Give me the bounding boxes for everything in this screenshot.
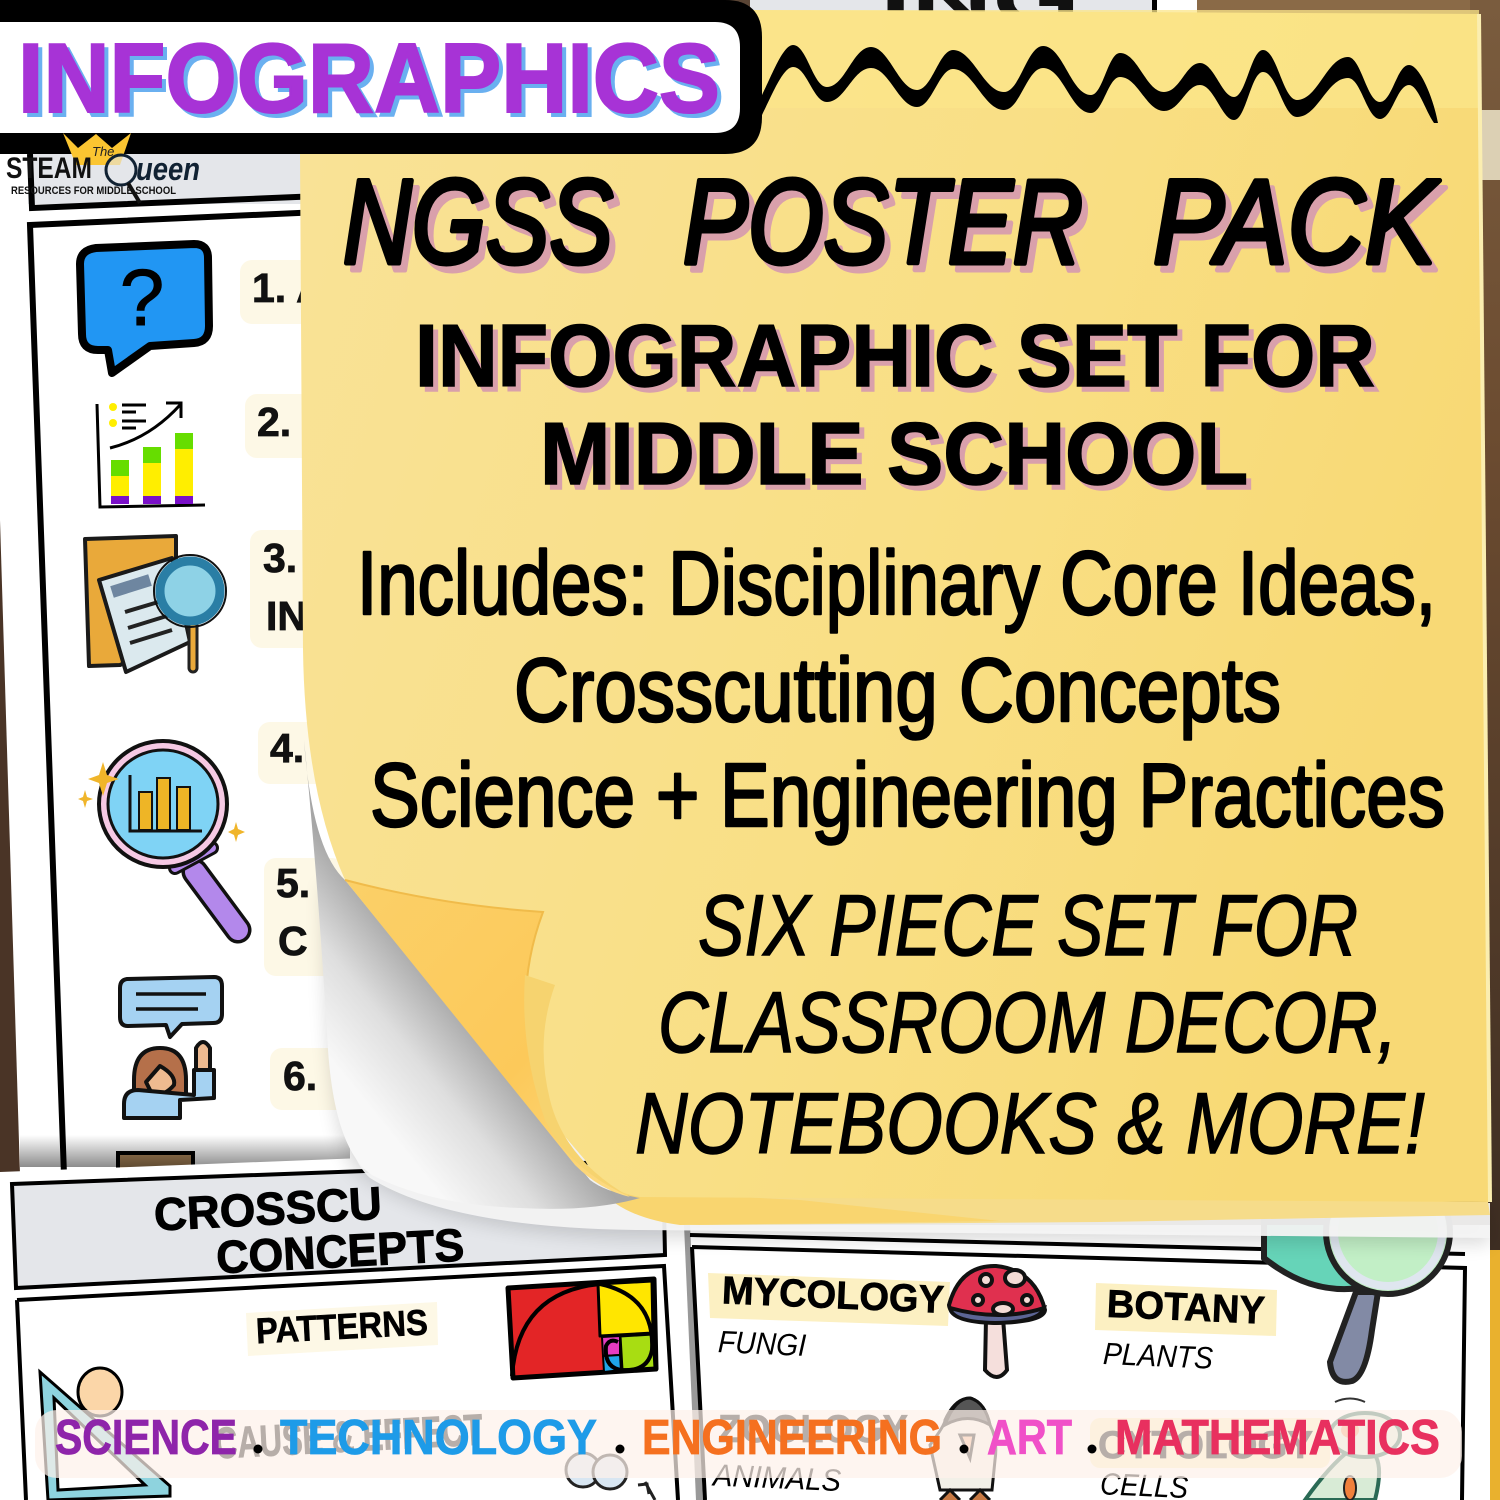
header tab bbox=[0, 0, 762, 154]
icon: golden ratio spiral bbox=[508, 1279, 656, 1378]
title: NGSS POSTER PACK: POSTER bbox=[689, 162, 1089, 296]
title: NGSS POSTER PACK bbox=[343, 155, 1446, 296]
header tab: INFOGRAPHICS bbox=[18, 23, 720, 133]
logo: The STEAM Queen: RESOURCES FOR MIDDLE SCHOOL bbox=[11, 185, 176, 197]
title: NGSS POSTER PACK: NGSS bbox=[343, 155, 613, 289]
header tab: INFOGRAPHICS bbox=[22, 27, 724, 137]
subtitle: infographic set for middle school: INFOGRAPHIC SET FOR bbox=[420, 311, 1380, 410]
sticky note bbox=[300, 10, 1490, 1202]
footer band: STEAM words: MATHEMATICS bbox=[1115, 1411, 1440, 1465]
step labels: 4. bbox=[270, 725, 304, 771]
icon: question speech bubble: ? bbox=[120, 253, 164, 342]
logo: The STEAM Queen: ueen bbox=[136, 151, 200, 187]
sticky note lower sheets bbox=[322, 880, 1490, 1244]
title: NGSS POSTER PACK: PACK bbox=[1153, 155, 1440, 289]
footer band: STEAM words: ENGINEERING bbox=[642, 1411, 942, 1465]
poster: life science branches bbox=[684, 1225, 1500, 1500]
poster: life science branches: MYCOLOGY bbox=[721, 1269, 945, 1322]
icon: triangle and ball bbox=[40, 1368, 170, 1500]
step labels: IN bbox=[266, 593, 307, 639]
footer band: STEAM words: TECHNOLOGY bbox=[280, 1411, 597, 1465]
icon: rising bar chart bbox=[97, 403, 205, 507]
poster: crosscutting concepts: CONCEPTS bbox=[215, 1218, 465, 1283]
icon: student with speech bubble bbox=[120, 977, 222, 1118]
icon: penguin bbox=[930, 1398, 996, 1500]
step labels: 1. A bbox=[252, 265, 326, 311]
footer band: STEAM words: SCIENCE bbox=[55, 1411, 237, 1465]
poster: life science branches: FUNGI bbox=[717, 1324, 807, 1363]
logo: The STEAM Queen: The bbox=[92, 144, 114, 159]
step labels bbox=[240, 260, 350, 1110]
footer band: STEAM words bbox=[35, 1410, 1462, 1478]
icon: question speech bubble bbox=[80, 244, 209, 373]
icon: large magnifier bbox=[1264, 1170, 1450, 1382]
poster: life science branches: ZOOLOGY bbox=[718, 1408, 908, 1451]
note curled flap bbox=[345, 880, 630, 1197]
title: NGSS POSTER PACK: NGSS bbox=[349, 162, 619, 296]
poster: crosscutting concepts bbox=[0, 1145, 700, 1500]
poster: life science branches: BOTANY bbox=[1106, 1283, 1266, 1333]
text block: six piece set bbox=[635, 878, 1425, 1172]
lower poster cast shadow bbox=[20, 1135, 350, 1167]
subtitle: infographic set for middle school: MIDDLE SCHOOL bbox=[545, 409, 1253, 508]
step labels: C bbox=[278, 918, 308, 964]
subtitle: infographic set for middle school: INFOGRAPHIC SET FOR bbox=[415, 306, 1375, 405]
icon: cell bbox=[1305, 1398, 1400, 1500]
icon: folder with magnifier bbox=[85, 536, 226, 672]
decorative wiggle bbox=[762, 45, 1438, 123]
note curl shadow bbox=[304, 740, 640, 1209]
step labels: 6. bbox=[283, 1053, 317, 1099]
poster: life science branches: CYTOLOGY bbox=[1098, 1424, 1313, 1467]
poster: life science branches: ANIMALS bbox=[711, 1457, 842, 1498]
step labels: 2. bbox=[257, 399, 291, 445]
logo: The STEAM Queen bbox=[6, 133, 200, 203]
icon: magnifier with chart bbox=[78, 741, 245, 930]
icon: cloud bbox=[566, 1453, 655, 1500]
text block: six piece set: SIX PIECE SET FOR bbox=[698, 878, 1358, 974]
logo: The STEAM Queen: STEAM bbox=[6, 152, 92, 185]
poster: crosscutting concepts: CROSSCU bbox=[153, 1177, 383, 1241]
poster: life science branches: PLANTS bbox=[1102, 1336, 1214, 1376]
step labels: 5. bbox=[276, 860, 310, 906]
title: NGSS POSTER PACK: PACK bbox=[1159, 162, 1446, 296]
title: NGSS POSTER PACK: POSTER bbox=[683, 155, 1083, 289]
subtitle: infographic set for middle school: MIDDLE SCHOOL bbox=[540, 404, 1248, 503]
icon: mushroom bbox=[949, 1266, 1045, 1377]
footer band: STEAM words: ART bbox=[987, 1411, 1072, 1465]
text block: includes list bbox=[357, 534, 1445, 846]
poster: top science practices bbox=[0, 0, 1197, 1190]
poster: crosscutting concepts: CAUSE & EFFECT bbox=[214, 1406, 484, 1469]
step labels: 3. bbox=[263, 535, 297, 581]
subtitle: infographic set for middle school bbox=[415, 306, 1380, 508]
poster: crosscutting concepts: PATTERNS bbox=[255, 1301, 429, 1351]
text block: includes list: Crosscutting Concepts bbox=[514, 641, 1281, 741]
